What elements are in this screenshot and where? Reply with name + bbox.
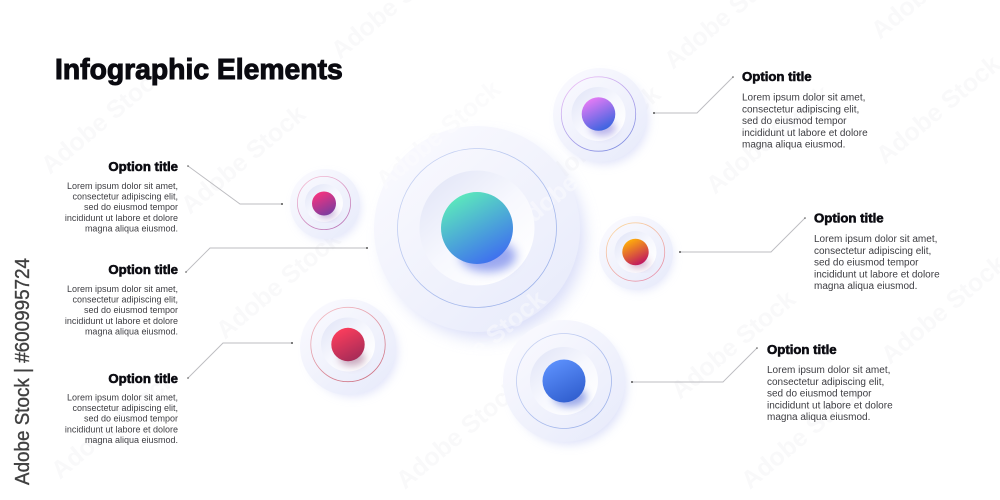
text block: upper left option: consectetur adipiscing elit,: [72, 192, 178, 202]
text block: top right option: sed do eiusmod tempor: [742, 116, 847, 127]
text block: middle left option: Lorem ipsum dolor sit amet,: [67, 284, 178, 294]
text block: upper left option: sed do eiusmod tempor: [84, 202, 178, 212]
text block: lower right option: [767, 342, 893, 423]
text block: lower left option: sed do eiusmod tempor: [84, 414, 178, 424]
circle: orange right: [599, 216, 673, 290]
circle: main center: Adobe Stock: [371, 75, 506, 195]
text block: lower left option: [65, 371, 178, 445]
text block: middle left option: sed do eiusmod tempor: [84, 305, 178, 315]
watermark pattern: Adobe Stock: [736, 375, 871, 495]
circle: main center: [371, 75, 584, 405]
text block: upper left option: Lorem ipsum dolor sit amet,: [67, 181, 178, 191]
title: Infographic Elements: [55, 53, 343, 85]
circle: red lower left: [300, 299, 397, 396]
text block: middle right option: [814, 210, 940, 292]
text block: middle right option: Lorem ipsum dolor sit amet,: [814, 234, 937, 245]
circle: blue lower center: [503, 320, 626, 444]
text block: top right option: consectetur adipiscing elit,: [742, 104, 859, 115]
text block: lower left option: Option title: [108, 371, 178, 386]
watermark pattern: Adobe Stock: [211, 225, 346, 345]
text block: top right option: [742, 69, 868, 151]
connector: pink: [187, 165, 283, 205]
text block: upper left option: incididunt ut labore et dolore: [65, 213, 178, 223]
text block: lower right option: incididunt ut labore et dolore: [767, 400, 893, 411]
text block: top right option: Lorem ipsum dolor sit amet,: [742, 92, 865, 104]
text block: lower left option: incididunt ut labore et dolore: [65, 424, 178, 434]
connector: purple: [653, 76, 734, 114]
text block: middle left option: magna aliqua eiusmod.: [85, 326, 178, 336]
text block: middle right option: sed do eiusmod tempor: [814, 258, 919, 269]
text block: middle left option: [65, 262, 178, 336]
circle: main center: Adobe: [506, 168, 584, 240]
text block: top right option: magna aliqua eiusmod.: [742, 140, 845, 151]
text block: upper left option: magna aliqua eiusmod.: [85, 223, 178, 233]
text block: upper left option: [65, 159, 178, 233]
circle: pink left: [290, 169, 360, 240]
text block: lower right option: Option title: [767, 342, 837, 357]
circle: main center: Adobe Stock: [416, 285, 551, 405]
text block: middle left option: Option title: [108, 262, 178, 277]
watermark pattern: Adobe Stock: [176, 100, 311, 220]
watermark pattern: Adobe Stock: [666, 285, 801, 405]
connector: blue: [631, 347, 758, 383]
text block: middle right option: consectetur adipiscing elit,: [814, 246, 931, 257]
watermark pattern: Adobe Stock: [531, 80, 666, 200]
watermark pattern: Adobe Stock: [371, 75, 506, 195]
watermark pattern: Adobe Stock: [46, 365, 181, 485]
connector: red: [187, 342, 293, 379]
text block: lower right option: magna aliqua eiusmod.: [767, 412, 870, 423]
text block: middle right option: incididunt ut labore et dolore: [814, 269, 940, 280]
connector: orange: [679, 217, 806, 253]
text block: lower left option: magna aliqua eiusmod.: [85, 435, 178, 445]
text block: lower left option: consectetur adipiscing elit,: [72, 403, 178, 413]
text block: lower right option: consectetur adipiscing elit,: [767, 377, 884, 388]
circle: purple top right: [553, 68, 648, 164]
text block: lower left option: Lorem ipsum dolor sit amet,: [67, 392, 178, 402]
text block: middle left option: consectetur adipiscing elit,: [72, 295, 178, 305]
connector: main circle: [185, 247, 368, 273]
text block: lower right option: sed do eiusmod tempor: [767, 389, 872, 400]
text block: middle right option: magna aliqua eiusmod.: [814, 281, 917, 292]
text block: upper left option: Option title: [108, 159, 178, 174]
watermark pattern: Adobe Stock: [701, 80, 836, 200]
watermark pattern: Adobe Stock: [36, 60, 171, 180]
text block: top right option: incididunt ut labore et dolore: [742, 128, 868, 139]
text block: middle right option: Option title: [814, 210, 884, 226]
text block: lower right option: Lorem ipsum dolor sit amet,: [767, 365, 890, 376]
text block: top right option: Option title: [742, 69, 812, 84]
text block: middle left option: incididunt ut labore et dolore: [65, 316, 178, 326]
stock credit vertical text: Adobe Stock | #600995724: [12, 258, 34, 485]
watermark pattern: Adobe Stock: [391, 375, 526, 495]
